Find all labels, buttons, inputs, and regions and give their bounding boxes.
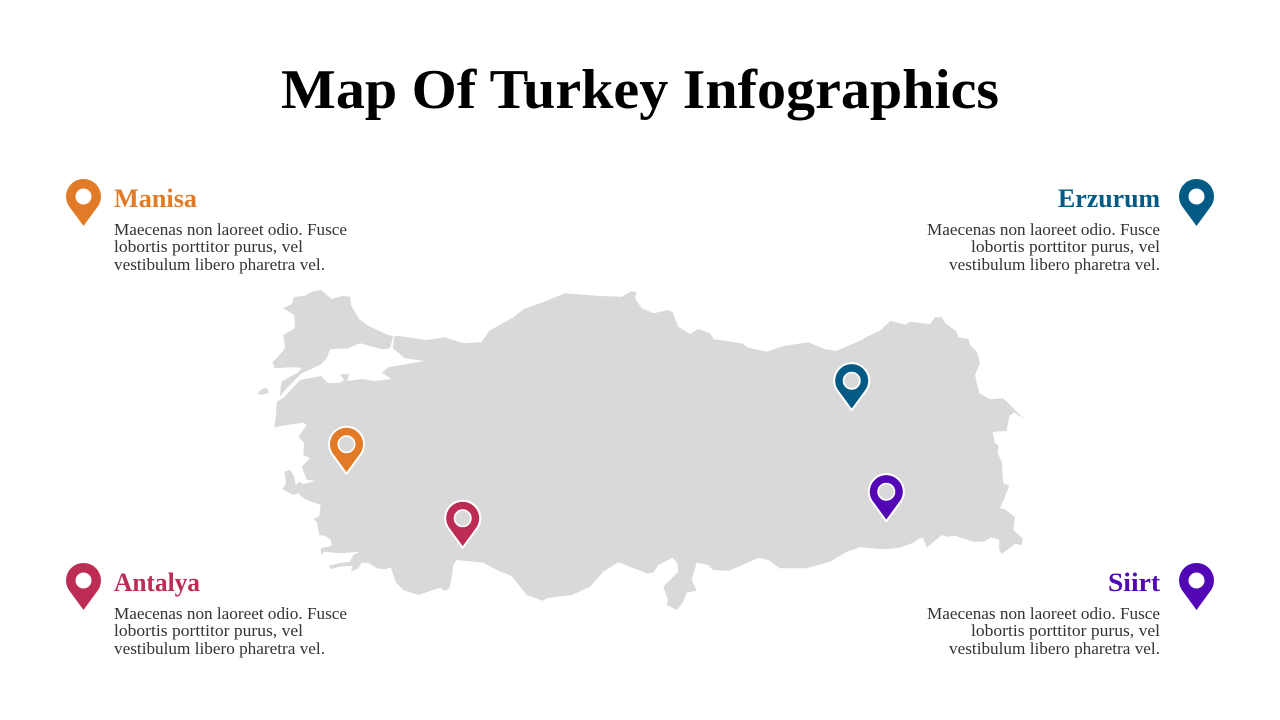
icon: Siirt pin <box>1179 563 1214 610</box>
text: Manisa description: Maecenas non laoreet odio. Fusce <box>114 220 347 239</box>
panel: Erzurum <box>927 179 1214 274</box>
text: Siirt description: vestibulum libero pharetra vel. <box>949 639 1160 658</box>
heading: Manisa: Manisa <box>114 184 197 213</box>
text: Manisa description: lobortis porttitor purus, vel <box>114 237 303 256</box>
text: Erzurum description: vestibulum libero pharetra vel. <box>949 255 1160 274</box>
heading: Erzurum: Erzurum <box>1058 184 1160 213</box>
text: Erzurum description: Maecenas non laoreet odio. Fusce <box>927 220 1160 239</box>
map pin: Siirt <box>869 474 904 521</box>
heading: Siirt: Siirt <box>1108 568 1160 597</box>
icon: Antalya pin <box>66 563 101 610</box>
text: Siirt description <box>927 604 1160 658</box>
panel: Manisa <box>66 179 347 274</box>
text: Erzurum description: lobortis porttitor purus, vel <box>971 237 1160 256</box>
text: Antalya description: lobortis porttitor purus, vel <box>114 621 303 640</box>
text: Siirt description: Maecenas non laoreet odio. Fusce <box>927 604 1160 623</box>
text: Antalya description: Maecenas non laoreet odio. Fusce <box>114 604 347 623</box>
text: Erzurum description <box>927 220 1160 274</box>
heading: Antalya: Antalya <box>114 568 200 597</box>
text: Siirt description: lobortis porttitor purus, vel <box>971 621 1160 640</box>
text: Manisa description: vestibulum libero pharetra vel. <box>114 255 325 274</box>
icon: Erzurum pin <box>1179 179 1214 226</box>
text: Antalya description <box>114 604 347 658</box>
map pin: Antalya <box>445 501 480 548</box>
panel: Siirt <box>927 563 1214 658</box>
map pin: Erzurum <box>834 363 869 410</box>
map pin: Manisa <box>329 427 364 474</box>
icon: Manisa pin <box>66 179 101 226</box>
map of Turkey <box>257 290 1024 610</box>
title: Map Of Turkey Infographics <box>281 59 999 121</box>
text: Antalya description: vestibulum libero pharetra vel. <box>114 639 325 658</box>
text: Manisa description <box>114 220 347 274</box>
panel: Antalya <box>66 563 347 658</box>
